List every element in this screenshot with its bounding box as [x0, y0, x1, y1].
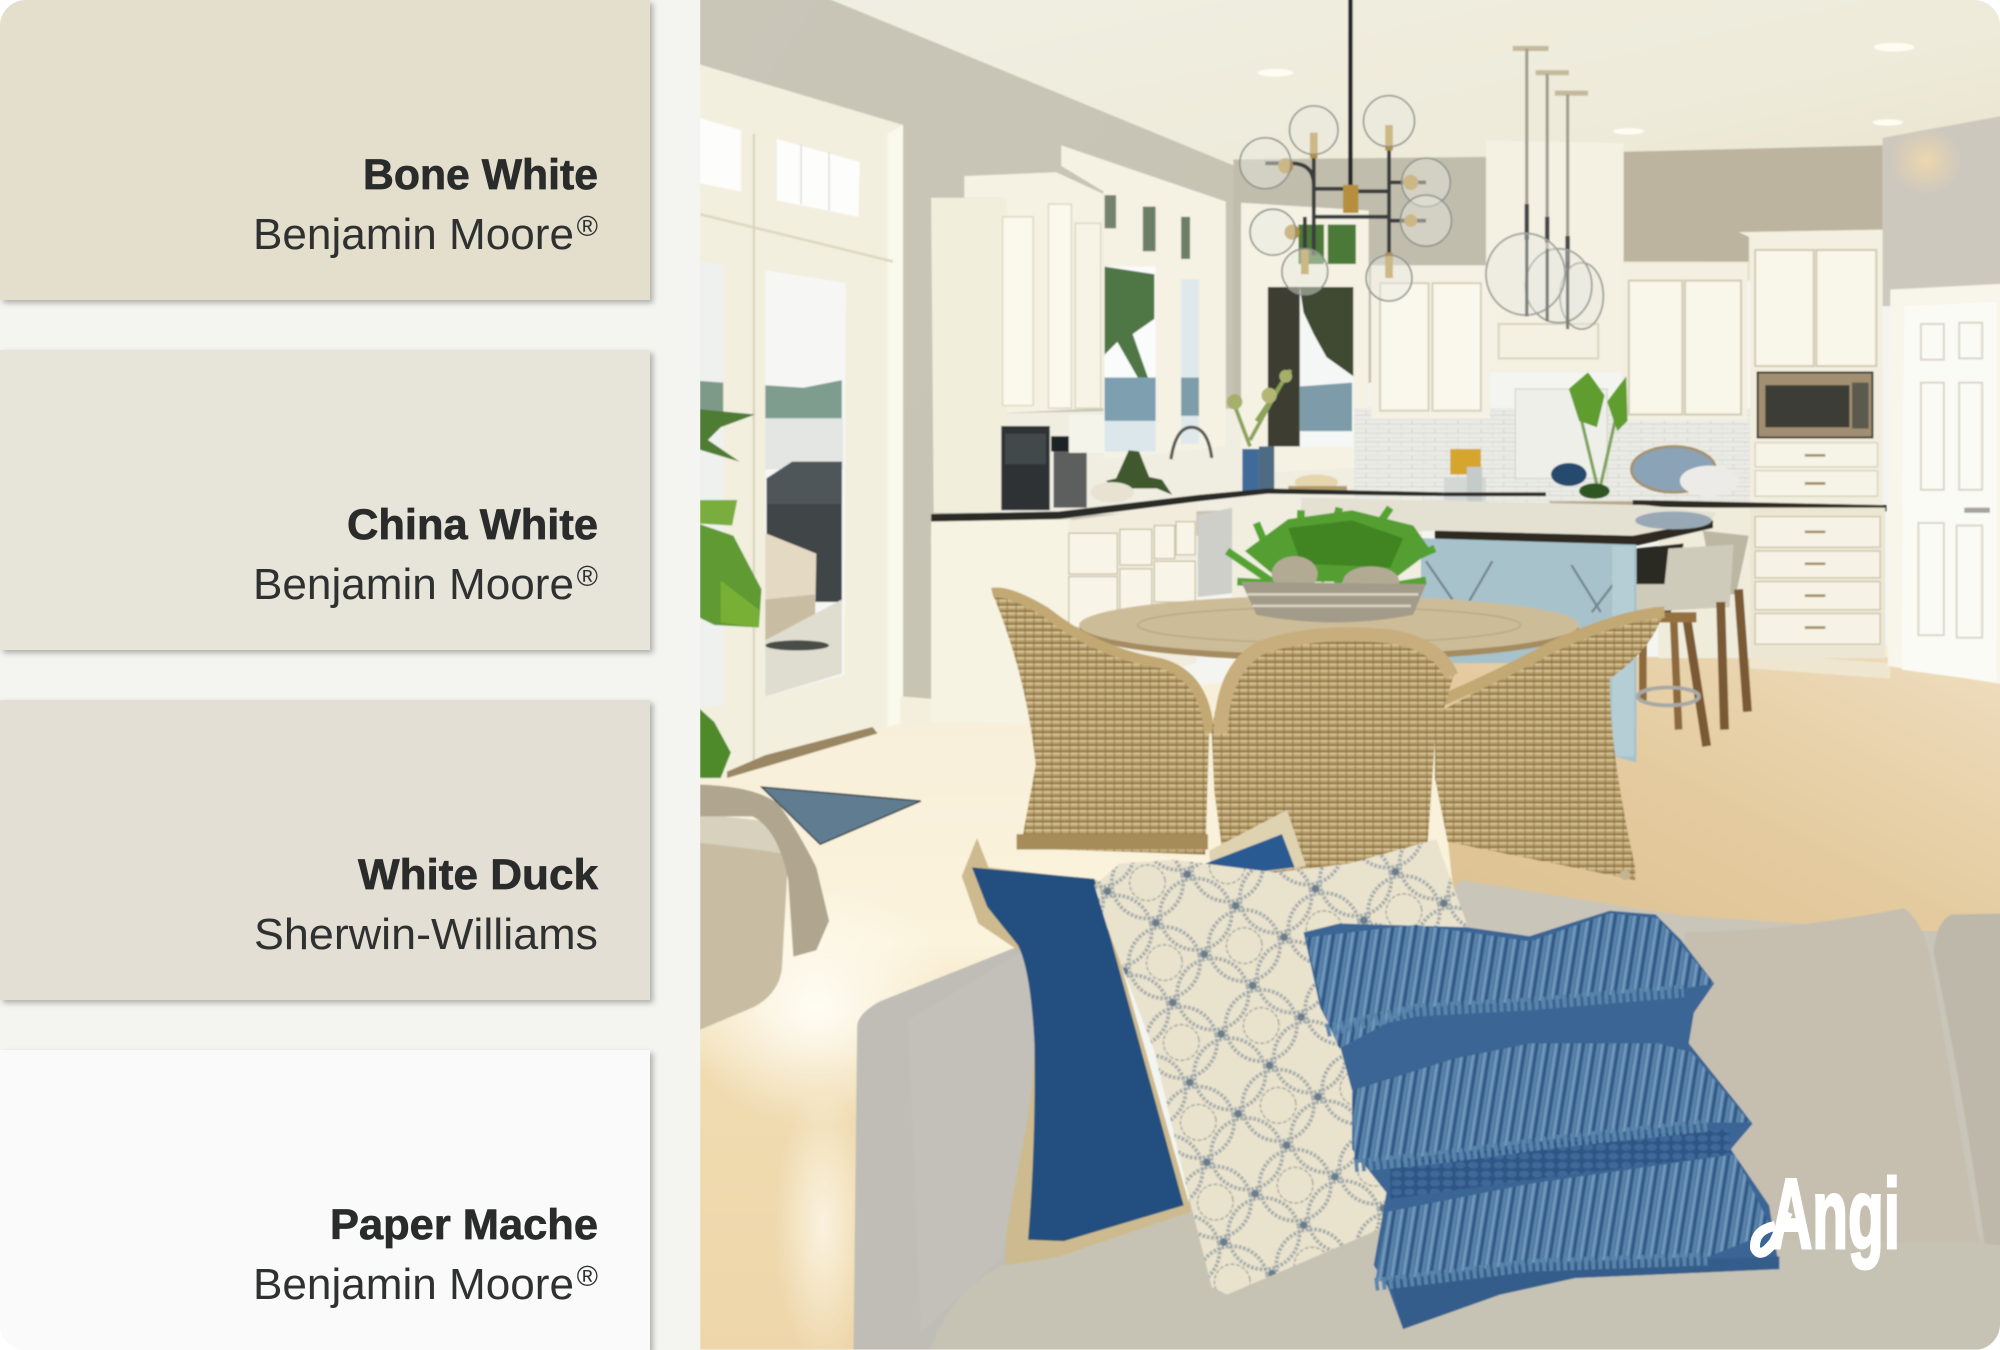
swatch: Paper Mache — [0, 1050, 650, 1350]
left wall — [689, 0, 1235, 791]
back wall — [1233, 157, 1489, 406]
swatch: China White: ® — [577, 561, 598, 593]
centre window — [1241, 203, 1369, 474]
right wall — [1883, 114, 2000, 306]
wicker chair right — [1435, 610, 1665, 880]
wicker chair centre — [1212, 631, 1455, 886]
swatch: White Duck — [0, 700, 650, 1000]
swatch: Paper Mache: Paper Mache — [330, 1201, 598, 1249]
upper kitchen cabinets — [1371, 140, 1883, 421]
recessed ceiling lights — [1258, 43, 1915, 135]
island — [1301, 497, 1716, 763]
panel: paint colour swatches — [0, 0, 650, 1350]
sofa — [853, 880, 2000, 1350]
logo: Angi — [1755, 1158, 1900, 1269]
ottoman and throw — [689, 784, 829, 1034]
swatch: China White: Benjamin Moore — [253, 560, 574, 609]
kitchen wall and backsplash — [1355, 389, 1750, 504]
left cabinets — [931, 172, 1103, 513]
ceiling — [833, 0, 2000, 281]
swatch: China White: China White — [347, 501, 598, 549]
navy linen pillow — [962, 810, 1306, 1265]
logo: Angi: Angi — [1770, 1158, 1900, 1269]
patterned pillow — [1094, 839, 1467, 1295]
pantry door — [1888, 283, 2000, 686]
swatch: White Duck: White Duck — [358, 851, 598, 899]
wicker chair left — [992, 593, 1209, 855]
photo: open plan kitchen and living room — [676, 0, 2000, 1350]
bar stools — [1636, 531, 1749, 746]
window sill and wall behind the counter — [1000, 406, 1378, 518]
swatch: Paper Mache: Benjamin Moore — [253, 1260, 574, 1309]
swatch: Bone White — [0, 0, 650, 300]
fringed blue pillow — [1304, 911, 1779, 1329]
french doors — [689, 61, 935, 781]
dining table — [1079, 596, 1579, 661]
lower cabinets — [931, 497, 1885, 724]
plant by the door — [700, 408, 762, 779]
microwave and drawers — [1750, 370, 1883, 510]
swatch: Bone White: Bone White — [363, 151, 598, 199]
left window — [1061, 145, 1226, 459]
chandelier — [1240, 0, 1452, 301]
countertop items — [1091, 368, 1738, 506]
glass pendant lights — [1486, 46, 1603, 329]
rug — [761, 787, 921, 844]
swatch: Bone White: Benjamin Moore — [253, 210, 574, 259]
swatch: Bone White: ® — [577, 211, 598, 243]
swatch: China White — [0, 350, 650, 650]
kitchen countertop — [931, 489, 1886, 522]
swatch: White Duck: Sherwin-Williams — [254, 910, 598, 959]
swatch: Paper Mache: ® — [577, 1261, 598, 1293]
floor — [676, 638, 2000, 1350]
fern centrepiece on table — [1227, 508, 1435, 622]
